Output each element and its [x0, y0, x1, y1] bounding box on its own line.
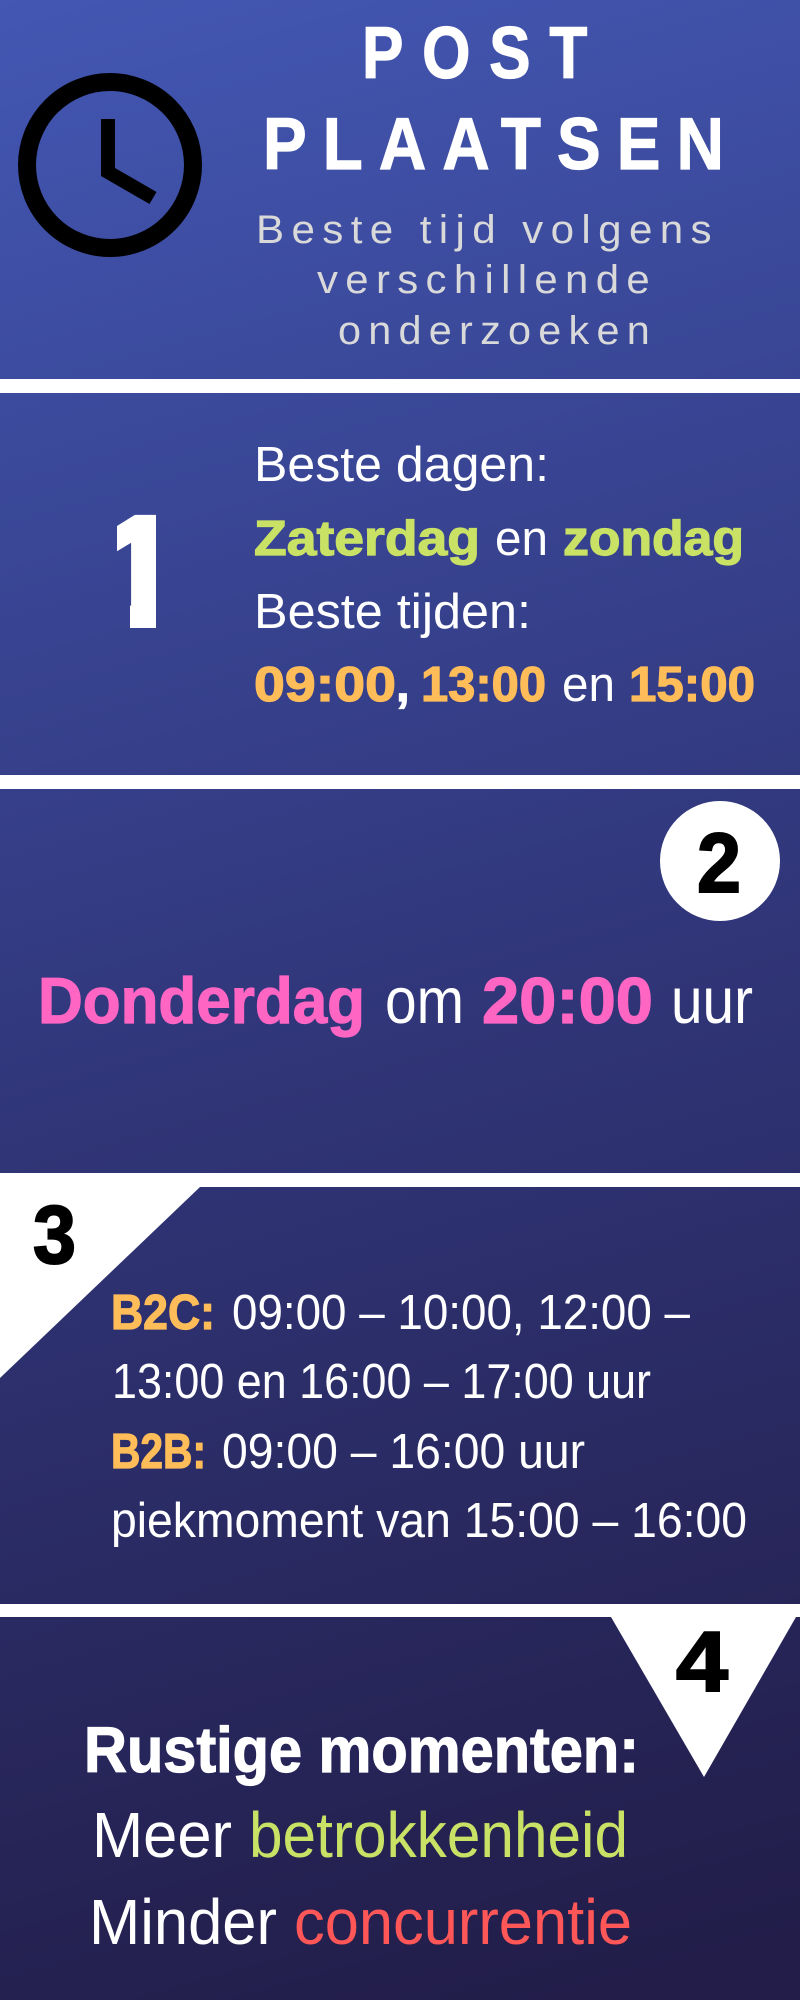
text: quiet moments heading: Rustige momenten:	[84, 1714, 639, 1786]
text: best days and times: ,	[396, 658, 410, 712]
text: best days and times	[254, 438, 755, 712]
text: thursday: 20:00	[482, 964, 653, 1037]
divider: white bar 3	[0, 1173, 800, 1187]
icon: clock	[27, 82, 193, 248]
text: best days and times: en	[562, 658, 615, 712]
panel: section 3	[0, 1187, 747, 1548]
text: thursday: om	[385, 964, 464, 1037]
text: B2C and B2B times: B2C:	[111, 1286, 215, 1340]
text: best days and times: 15:00	[629, 658, 755, 712]
text: best days and times: en	[495, 512, 548, 566]
panel: section 1	[97, 438, 755, 712]
subtitle: verschillende	[317, 258, 657, 302]
badge: number 3	[0, 1187, 200, 1378]
title: PLAATSEN	[263, 104, 740, 185]
text: thursday: Donderdag	[38, 964, 365, 1037]
badge: number 3: 3	[33, 1188, 76, 1281]
text: best days and times: Zaterdag	[254, 512, 480, 566]
text: B2C and B2B times: piekmoment van 15:00 – 16:00	[111, 1494, 747, 1548]
text: less competition: concurrentie	[294, 1886, 632, 1958]
text: best days and times: 13:00	[421, 658, 546, 712]
text: best days and times: zondag	[563, 512, 744, 566]
title: POST	[362, 13, 606, 94]
text: B2C and B2B times: 09:00 – 10:00, 12:00 –	[232, 1286, 691, 1340]
text: thursday: uur	[671, 964, 753, 1037]
panel: section 2	[38, 801, 780, 1037]
text: best days and times: Beste tijden:	[254, 585, 531, 639]
subtitle	[256, 208, 719, 353]
panel: header	[27, 13, 740, 353]
divider: white bar 1	[0, 379, 800, 393]
divider: white bar 4	[0, 1604, 800, 1617]
divider: white bar 2	[0, 775, 800, 789]
text: B2C and B2B times	[111, 1286, 747, 1548]
text: best days and times: Beste dagen:	[254, 438, 549, 492]
title	[263, 13, 740, 185]
badge: number 4: 4	[676, 1615, 728, 1710]
text: less competition	[89, 1886, 632, 1958]
text: less competition: Minder	[89, 1886, 277, 1958]
subtitle: Beste tijd volgens	[256, 208, 719, 252]
badge: number 4	[611, 1615, 796, 1777]
panel: section 4	[84, 1615, 796, 1958]
subtitle: onderzoeken	[338, 309, 657, 353]
text: more engagement: Meer	[92, 1799, 232, 1871]
text: B2C and B2B times: 09:00 – 16:00 uur	[222, 1425, 585, 1479]
number 1: 1	[97, 485, 187, 658]
text: B2C and B2B times: 13:00 en 16:00 – 17:00 uur	[112, 1355, 651, 1409]
badge: number 2: 2	[697, 816, 741, 910]
text: more engagement	[92, 1799, 628, 1871]
text: more engagement: betrokkenheid	[249, 1799, 628, 1871]
text: B2C and B2B times: B2B:	[111, 1425, 206, 1479]
text: thursday	[38, 964, 753, 1037]
badge: number 2	[660, 801, 780, 921]
text: best days and times: 09:00	[254, 658, 396, 712]
